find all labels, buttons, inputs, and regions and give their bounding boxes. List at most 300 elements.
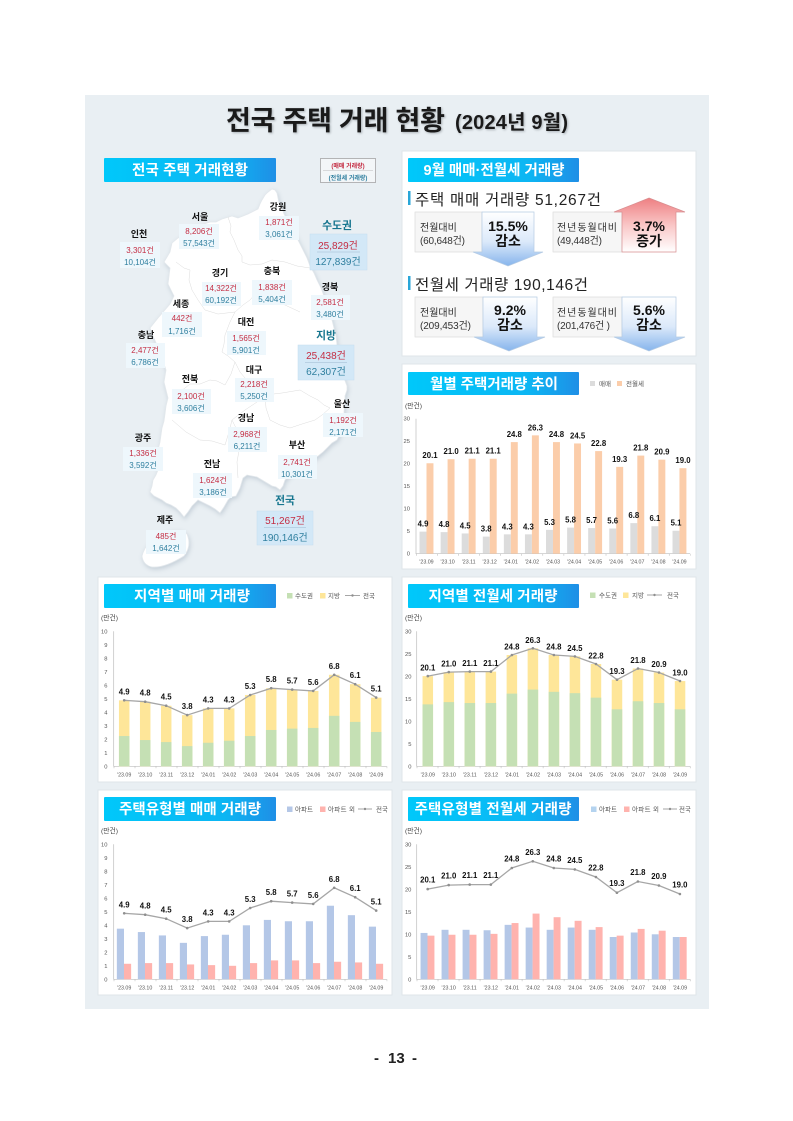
comparison: previous year lease: (201,476건 ) xyxy=(557,320,610,332)
grouped bar and line chart: housing type sales: '24.09 xyxy=(369,985,383,991)
region: 대전: 1,565건 xyxy=(232,333,260,343)
grouped bar and line chart: housing type lease: '24.02 xyxy=(526,985,540,991)
total: 전국 xyxy=(257,494,313,545)
heading: regional lease: 지역별 전월세 거래량 xyxy=(428,588,558,605)
stacked bar and line chart: regional lease: '23.12 xyxy=(484,772,498,778)
grouped bar and line chart: housing type lease: '24.03 xyxy=(547,985,561,991)
bar chart: monthly trend: 20.1 xyxy=(422,451,438,460)
stacked bar and line chart: regional sales: '24.03 xyxy=(243,772,257,778)
subheading: sales volume: 주택 매매 거래량 51,267건 xyxy=(415,191,601,209)
region: 강원: 3,061건 xyxy=(265,229,293,239)
region: 전북: 전북 xyxy=(182,374,198,384)
stacked bar and line chart: regional lease: 15 xyxy=(405,697,411,703)
stacked bar and line chart: regional lease: '24.06 xyxy=(610,772,624,778)
heading: September xyxy=(408,158,579,182)
stacked bar and line chart: regional sales: 6.8 xyxy=(329,662,340,671)
page number: - xyxy=(374,1050,379,1067)
stacked bar and line chart: regional lease: 21.1 xyxy=(483,659,499,668)
grouped bar and line chart: housing type lease: 22.8 xyxy=(588,863,604,872)
grouped bar and line chart: housing type lease: 26.3 xyxy=(525,848,541,857)
stacked bar and line chart: regional lease: 25 xyxy=(405,652,411,658)
bar chart: monthly trend: '24.05 xyxy=(588,560,602,566)
grouped bar and line chart: housing type sales: '23.09 xyxy=(117,985,131,991)
heading: monthly trend xyxy=(408,372,579,395)
region: 충남: 충남 xyxy=(138,329,155,340)
legend: housing type lease: 아파트 외 xyxy=(632,804,659,814)
grouped bar and line chart: housing type sales: 2 xyxy=(104,950,107,956)
stacked bar and line chart: regional sales: 8 xyxy=(104,657,107,663)
region: 경북 xyxy=(311,281,350,320)
region: 경북: 3,480건 xyxy=(316,309,344,319)
grouped bar and line chart: housing type sales: 9 xyxy=(104,856,107,862)
stacked bar and line chart: regional lease: 22.8 xyxy=(588,651,604,660)
stacked bar and line chart: regional sales: '23.10 xyxy=(138,772,152,778)
bar chart: monthly trend: 10 xyxy=(404,507,410,513)
heading: monthly trend: 월별 주택거래량 추이 xyxy=(430,376,558,393)
bar chart: monthly trend: 24.5 xyxy=(570,431,586,440)
comparison: previous year sales: (49,448건) xyxy=(557,235,602,247)
bar chart: monthly trend: '23.09 xyxy=(419,560,434,566)
legend: regional lease: 수도권 xyxy=(599,592,617,600)
grouped bar and line chart: housing type sales: '24.04 xyxy=(264,985,278,991)
stacked bar and line chart: regional sales: 6 xyxy=(104,683,107,689)
bar chart: monthly trend: '24.03 xyxy=(546,560,560,566)
grouped bar and line chart: housing type sales: 4.9 xyxy=(119,900,130,909)
stacked bar and line chart: regional sales: '23.09 xyxy=(117,772,131,778)
bar chart: monthly trend: 4.9 xyxy=(418,520,429,529)
grouped bar and line chart: housing type lease: '23.09 xyxy=(421,985,435,991)
region: 대구: 5,250건 xyxy=(240,391,268,401)
bar chart: monthly trend: 21.1 xyxy=(486,447,501,456)
grouped bar and line chart: housing type sales: 6.1 xyxy=(350,884,361,893)
stacked bar and line chart: regional sales: 9 xyxy=(104,643,107,649)
grouped bar and line chart: housing type sales: '24.01 xyxy=(201,985,215,991)
comparison: previous year sales xyxy=(553,212,622,252)
stacked bar and line chart: regional sales: 2 xyxy=(104,737,107,743)
subheading: lease volume: 전월세 거래량 190,146건 xyxy=(415,276,588,294)
heading: regional lease xyxy=(408,584,579,608)
bar chart: monthly trend: 4.3 xyxy=(502,522,513,531)
stacked bar and line chart: regional lease: 24.8 xyxy=(504,642,520,651)
total: 전국: 51,267건 xyxy=(265,515,305,527)
stacked bar and line chart: regional lease: '24.05 xyxy=(589,772,603,778)
comparison: previous year sales: 전년동월대비 xyxy=(557,222,617,234)
stacked bar and line chart: regional lease: 20.9 xyxy=(651,660,667,669)
heading: map: 전국 주택 거래현황 xyxy=(132,162,248,179)
comparison: previous year lease xyxy=(553,297,622,337)
comparison: previous month lease xyxy=(415,297,483,337)
arrow: lease down 9.2%: 9.2% xyxy=(494,302,527,318)
arrow: lease down 5.6% xyxy=(614,297,685,351)
region: 충북: 5,404건 xyxy=(258,294,286,304)
bar chart: monthly trend xyxy=(404,417,691,566)
grouped bar and line chart: housing type sales: '24.03 xyxy=(243,985,257,991)
region: 세종 xyxy=(162,298,202,337)
grouped bar and line chart: housing type lease: 10 xyxy=(405,932,411,938)
region: 충남: 6,786건 xyxy=(131,357,159,367)
grouped bar and line chart: housing type lease: '24.06 xyxy=(610,985,624,991)
region: 광주: 광주 xyxy=(135,432,151,443)
grouped bar and line chart: housing type lease: 24.5 xyxy=(567,856,583,865)
arrow: sales up 3.7%: 3.7% xyxy=(633,218,666,234)
panel: regional sales chart xyxy=(98,577,392,782)
stacked bar and line chart: regional sales: 4.8 xyxy=(140,689,151,698)
title xyxy=(226,106,568,136)
grouped bar and line chart: housing type sales: 4 xyxy=(104,923,108,929)
bar chart: monthly trend: '23.12 xyxy=(483,560,497,566)
region: 부산 xyxy=(278,439,317,479)
region: 서울 xyxy=(179,211,219,249)
stacked bar and line chart: regional lease: 21.1 xyxy=(462,659,478,668)
region: 제주: 485건 xyxy=(156,531,176,541)
grouped bar and line chart: housing type sales: '23.12 xyxy=(180,985,194,991)
legend: monthly trend xyxy=(590,379,644,388)
region: 강원: 1,871건 xyxy=(265,217,293,227)
grouped bar and line chart: housing type sales: '24.08 xyxy=(348,985,362,991)
region: 대전: 5,901건 xyxy=(232,345,260,355)
panel: housing type lease chart xyxy=(402,790,696,995)
grouped bar and line chart: housing type lease: '24.07 xyxy=(631,985,645,991)
region: 서울: 8,206건 xyxy=(185,226,213,236)
grouped bar and line chart: housing type lease: 30 xyxy=(405,842,411,848)
panel: regional lease chart xyxy=(402,577,696,782)
bar chart: monthly trend: 21.8 xyxy=(633,444,649,453)
comparison: previous month lease: 전월대비 xyxy=(420,307,457,319)
region: 부산: 2,741건 xyxy=(283,457,311,467)
stacked bar and line chart: regional lease: '23.09 xyxy=(421,772,435,778)
region: 경남: 6,211건 xyxy=(234,441,260,451)
total: 지방: 지방 xyxy=(316,329,336,342)
region: 강원: 강원 xyxy=(270,201,286,212)
grouped bar and line chart: housing type sales: '24.07 xyxy=(327,985,341,991)
grouped bar and line chart: housing type sales: '24.02 xyxy=(222,985,236,991)
grouped bar and line chart: housing type lease: 20 xyxy=(405,887,411,893)
stacked bar and line chart: regional sales: '24.02 xyxy=(222,772,236,778)
region: 울산 xyxy=(323,398,363,437)
background panel xyxy=(85,95,709,1009)
stacked bar and line chart: regional lease: '24.03 xyxy=(547,772,561,778)
unit label: (만건) xyxy=(101,613,118,622)
legend: regional sales: 지방 xyxy=(328,591,340,600)
stacked bar and line chart: regional lease: 24.5 xyxy=(567,644,583,653)
legend: housing type sales: 아파트 xyxy=(295,804,313,814)
grouped bar and line chart: housing type sales: 8 xyxy=(104,869,107,875)
grouped bar and line chart: housing type sales: 5.1 xyxy=(371,898,382,907)
arrow: lease down 5.6%: 감소 xyxy=(636,317,662,333)
grouped bar and line chart: housing type lease: 24.8 xyxy=(504,854,520,863)
heading: housing type sales xyxy=(104,797,276,821)
region: 제주 xyxy=(146,514,186,554)
grouped bar and line chart: housing type lease: 21.1 xyxy=(483,871,499,880)
region: 경기: 60,192건 xyxy=(205,295,237,305)
bar chart: monthly trend: 21.0 xyxy=(444,447,459,456)
region: 광주 xyxy=(123,432,163,471)
arrow: lease down 9.2% xyxy=(474,297,545,351)
stacked bar and line chart: regional sales: 4 xyxy=(104,710,108,716)
bar chart: monthly trend: '24.02 xyxy=(525,560,539,566)
panel: September transactions xyxy=(402,151,696,356)
bar chart: monthly trend: '23.11 xyxy=(462,560,476,566)
bar chart: monthly trend: '24.09 xyxy=(672,560,687,566)
stacked bar and line chart: regional sales: 7 xyxy=(104,670,107,676)
heading: housing type lease: 주택유형별 전월세 거래량 xyxy=(414,801,572,818)
grouped bar and line chart: housing type sales: 3 xyxy=(104,937,107,943)
grouped bar and line chart: housing type lease: '24.05 xyxy=(589,985,603,991)
stacked bar and line chart: regional lease: 30 xyxy=(405,630,411,636)
unit label: (만건) xyxy=(405,826,422,835)
legend: housing type sales xyxy=(287,804,388,814)
region: 전북: 3,606건 xyxy=(177,403,205,413)
grouped bar and line chart: housing type lease: '23.11 xyxy=(463,985,477,991)
stacked bar and line chart: regional sales: '24.05 xyxy=(285,772,299,778)
stacked bar and line chart: regional sales xyxy=(101,630,387,778)
stacked bar and line chart: regional lease: 24.8 xyxy=(546,642,562,651)
legend: monthly trend: 전월세 xyxy=(626,379,644,388)
panel: monthly trend chart xyxy=(402,364,696,569)
stacked bar and line chart: regional sales: '23.11 xyxy=(159,772,173,778)
heading: regional sales xyxy=(104,584,276,608)
region: 대구: 2,218건 xyxy=(240,379,268,389)
bar chart: monthly trend: 5.1 xyxy=(671,519,682,528)
region: 충남 xyxy=(126,329,165,368)
grouped bar and line chart: housing type sales: 4.8 xyxy=(140,902,151,911)
total: 수도권: 수도권 xyxy=(322,219,352,232)
stacked bar and line chart: regional sales: 3 xyxy=(104,724,107,730)
bar chart: monthly trend: 15 xyxy=(404,484,410,490)
region: 제주: 1,642건 xyxy=(152,543,180,553)
stacked bar and line chart: regional lease: 19.0 xyxy=(672,668,688,677)
region: 대구: 대구 xyxy=(246,364,262,375)
arrow: sales down 15.5%: 15.5% xyxy=(488,218,528,234)
grouped bar and line chart: housing type lease: '24.04 xyxy=(568,985,582,991)
bar chart: monthly trend: '24.08 xyxy=(651,560,666,566)
bar chart: monthly trend: 4.8 xyxy=(439,520,450,529)
legend: map: (전월세 거래량) xyxy=(329,174,367,182)
stacked bar and line chart: regional sales: 5.6 xyxy=(308,678,319,687)
unit label: (만건) xyxy=(405,613,422,622)
legend: regional sales: 전국 xyxy=(363,591,375,600)
heading: map xyxy=(104,158,276,182)
total: 지방 xyxy=(298,329,354,380)
grouped bar and line chart: housing type sales: 5.8 xyxy=(266,888,277,897)
total: 전국: 190,146건 xyxy=(262,532,308,544)
stacked bar and line chart: regional lease: 10 xyxy=(405,719,411,725)
region: 인천: 인천 xyxy=(131,228,147,239)
region: 인천: 3,301건 xyxy=(126,245,154,255)
legend: housing type lease: 전국 xyxy=(679,804,691,814)
bar chart: monthly trend: '24.01 xyxy=(504,560,518,566)
region: 경북: 2,581건 xyxy=(316,297,344,307)
region: 울산: 2,171건 xyxy=(329,427,357,437)
stacked bar and line chart: regional sales: '23.12 xyxy=(180,772,194,778)
stacked bar and line chart: regional sales: 10 xyxy=(101,630,107,636)
region: 울산: 울산 xyxy=(334,398,351,409)
title: (2024년 9월) xyxy=(455,111,568,134)
heading: September: 9월 매매·전월세 거래량 xyxy=(424,162,564,179)
stacked bar and line chart: regional sales: '24.08 xyxy=(348,772,362,778)
legend: monthly trend: 매매 xyxy=(599,380,611,388)
grouped bar and line chart: housing type lease: 5 xyxy=(408,955,411,961)
bar chart: monthly trend: 21.1 xyxy=(465,447,480,456)
map outline of Korea xyxy=(142,189,347,567)
grouped bar and line chart: housing type lease: 25 xyxy=(405,865,411,871)
grouped bar and line chart: housing type sales: '24.06 xyxy=(306,985,320,991)
legend: regional lease: 지방 xyxy=(632,590,644,600)
legend: regional sales xyxy=(287,591,375,600)
grouped bar and line chart: housing type sales: 4.3 xyxy=(203,908,214,917)
stacked bar and line chart: regional lease: '24.02 xyxy=(526,772,540,778)
stacked bar and line chart: regional lease: '24.07 xyxy=(631,772,645,778)
bar chart: monthly trend: 6.8 xyxy=(628,511,640,520)
grouped bar and line chart: housing type sales xyxy=(101,842,387,991)
grouped bar and line chart: housing type lease: 24.8 xyxy=(546,854,562,863)
unit label: (만건) xyxy=(405,401,422,410)
unit label: (만건) xyxy=(101,826,118,835)
stacked bar and line chart: regional sales: 1 xyxy=(104,751,107,757)
stacked bar and line chart: regional sales: 4.3 xyxy=(203,695,214,704)
bar chart: monthly trend: 5.7 xyxy=(586,516,597,525)
arrow: sales down 15.5% xyxy=(473,212,543,266)
stacked bar and line chart: regional sales: '24.01 xyxy=(201,772,215,778)
bar chart: monthly trend: 3.8 xyxy=(481,525,492,534)
arrow: sales up 3.7%: 증가 xyxy=(636,233,662,249)
region: 제주: 제주 xyxy=(157,514,173,525)
region: 대전: 대전 xyxy=(238,316,254,327)
stacked bar and line chart: regional lease: '24.08 xyxy=(652,772,666,778)
region: 강원 xyxy=(259,201,299,240)
stacked bar and line chart: regional lease: '23.11 xyxy=(463,772,477,778)
stacked bar and line chart: regional sales: 3.8 xyxy=(182,702,193,711)
arrow: lease down 9.2%: 감소 xyxy=(497,317,523,333)
region: 충남: 2,477건 xyxy=(131,345,159,355)
arrow: sales down 15.5%: 감소 xyxy=(495,233,521,249)
bar chart: monthly trend: 20.9 xyxy=(654,448,670,457)
bar chart: monthly trend: 26.3 xyxy=(528,423,544,432)
legend: regional lease: 전국 xyxy=(667,590,679,600)
panel: national housing transaction map xyxy=(104,158,376,567)
stacked bar and line chart: regional lease: 21.0 xyxy=(441,660,457,669)
region: 전남: 전남 xyxy=(204,458,221,469)
stacked bar and line chart: regional lease: 20.1 xyxy=(420,664,436,673)
region: 세종: 442건 xyxy=(172,313,192,323)
page number: - xyxy=(412,1050,417,1067)
bar chart: monthly trend: 24.8 xyxy=(507,430,523,439)
region: 경남: 2,968건 xyxy=(233,429,261,439)
title: 전국 주택 거래 현황 xyxy=(226,106,445,136)
bar chart: monthly trend: '24.06 xyxy=(609,560,623,566)
grouped bar and line chart: housing type lease: '24.09 xyxy=(673,985,687,991)
legend: housing type lease: 아파트 xyxy=(599,804,617,814)
stacked bar and line chart: regional lease: 0 xyxy=(408,764,411,770)
heading: regional sales: 지역별 매매 거래량 xyxy=(134,588,250,605)
bar chart: monthly trend: 5.3 xyxy=(544,518,556,527)
region: 경기 xyxy=(202,267,241,306)
page number: 13 xyxy=(388,1050,405,1067)
legend: regional sales: 수도권 xyxy=(295,592,313,600)
grouped bar and line chart: housing type sales: 7 xyxy=(104,883,107,889)
region: 부산: 10,301건 xyxy=(281,469,313,479)
heading: housing type sales: 주택유형별 매매 거래량 xyxy=(119,801,261,818)
region: 인천: 10,104건 xyxy=(124,257,156,267)
region: 부산: 부산 xyxy=(289,439,306,450)
region: 충북 xyxy=(252,266,292,305)
stacked bar and line chart: regional sales: 5.8 xyxy=(266,675,277,684)
region: 경기: 경기 xyxy=(212,267,228,278)
total: 전국: 전국 xyxy=(275,494,295,507)
bar chart: monthly trend: 4.3 xyxy=(523,522,534,531)
stacked bar and line chart: regional lease: 19.3 xyxy=(609,667,625,676)
region: 충북: 충북 xyxy=(264,266,280,276)
region: 세종: 세종 xyxy=(173,298,189,309)
grouped bar and line chart: housing type lease: '24.01 xyxy=(505,985,519,991)
grouped bar and line chart: housing type sales: 5.7 xyxy=(287,890,298,899)
total: 수도권: 127,839건 xyxy=(315,256,361,268)
grouped bar and line chart: housing type sales: 5.3 xyxy=(245,895,256,904)
grouped bar and line chart: housing type lease: 21.1 xyxy=(462,871,478,880)
region: 경북: 경북 xyxy=(322,281,338,292)
grouped bar and line chart: housing type lease: 0 xyxy=(408,977,411,983)
stacked bar and line chart: regional sales: 5 xyxy=(104,697,107,703)
stacked bar and line chart: regional sales: 4.9 xyxy=(119,687,130,696)
panel: housing type sales chart xyxy=(98,790,392,995)
stacked bar and line chart: regional lease: 20 xyxy=(405,675,411,681)
total: 수도권: 25,829건 xyxy=(318,240,358,252)
legend: housing type sales: 아파트 외 xyxy=(328,804,355,814)
grouped bar and line chart: housing type lease: 15 xyxy=(405,910,411,916)
legend: housing type lease xyxy=(591,804,691,814)
region: 대구 xyxy=(235,364,274,402)
stacked bar and line chart: regional sales: 5.3 xyxy=(245,682,256,691)
stacked bar and line chart: regional sales: '24.09 xyxy=(369,772,383,778)
region: 울산: 1,192건 xyxy=(329,415,357,425)
region: 서울: 서울 xyxy=(192,211,208,222)
region: 경남 xyxy=(228,412,267,452)
grouped bar and line chart: housing type lease: '24.08 xyxy=(652,985,666,991)
stacked bar and line chart: regional lease: 21.8 xyxy=(630,656,646,665)
grouped bar and line chart: housing type sales: 5 xyxy=(104,910,107,916)
bar chart: monthly trend: 22.8 xyxy=(591,439,607,448)
region: 전북: 2,100건 xyxy=(177,391,205,401)
bar chart: monthly trend: 5.8 xyxy=(565,516,577,525)
grouped bar and line chart: housing type sales: '23.10 xyxy=(138,985,152,991)
legend: housing type sales: 전국 xyxy=(376,804,388,814)
stacked bar and line chart: regional lease: '24.09 xyxy=(673,772,687,778)
region: 전남: 1,624건 xyxy=(199,475,227,485)
bar chart: monthly trend: 6.1 xyxy=(649,514,661,523)
stacked bar and line chart: regional lease: 26.3 xyxy=(525,636,541,645)
legend: map xyxy=(320,158,376,182)
grouped bar and line chart: housing type sales: 6.8 xyxy=(329,875,340,884)
region: 광주: 3,592건 xyxy=(129,460,157,470)
region: 전남: 3,186건 xyxy=(199,487,227,497)
grouped bar and line chart: housing type sales: '23.11 xyxy=(159,985,173,991)
region: 경남: 경남 xyxy=(238,412,255,423)
region: 경기: 14,322건 xyxy=(205,283,237,293)
region: 대전 xyxy=(227,316,266,355)
grouped bar and line chart: housing type sales: 4.3 xyxy=(224,908,235,917)
stacked bar and line chart: regional sales: 6.1 xyxy=(350,671,361,680)
total: 지방: 62,307건 xyxy=(306,366,346,378)
stacked bar and line chart: regional sales: 5.1 xyxy=(371,685,382,694)
comparison: previous month sales: 전월대비 xyxy=(420,222,457,234)
grouped bar and line chart: housing type lease: 20.1 xyxy=(420,876,436,885)
stacked bar and line chart: regional sales: 4.5 xyxy=(161,693,172,702)
stacked bar and line chart: regional sales: 4.3 xyxy=(224,695,235,704)
bar chart: monthly trend: 30 xyxy=(404,417,410,423)
bar chart: monthly trend: 19.3 xyxy=(612,455,628,464)
arrow: lease down 5.6%: 5.6% xyxy=(633,302,666,318)
region: 전남 xyxy=(193,458,232,498)
